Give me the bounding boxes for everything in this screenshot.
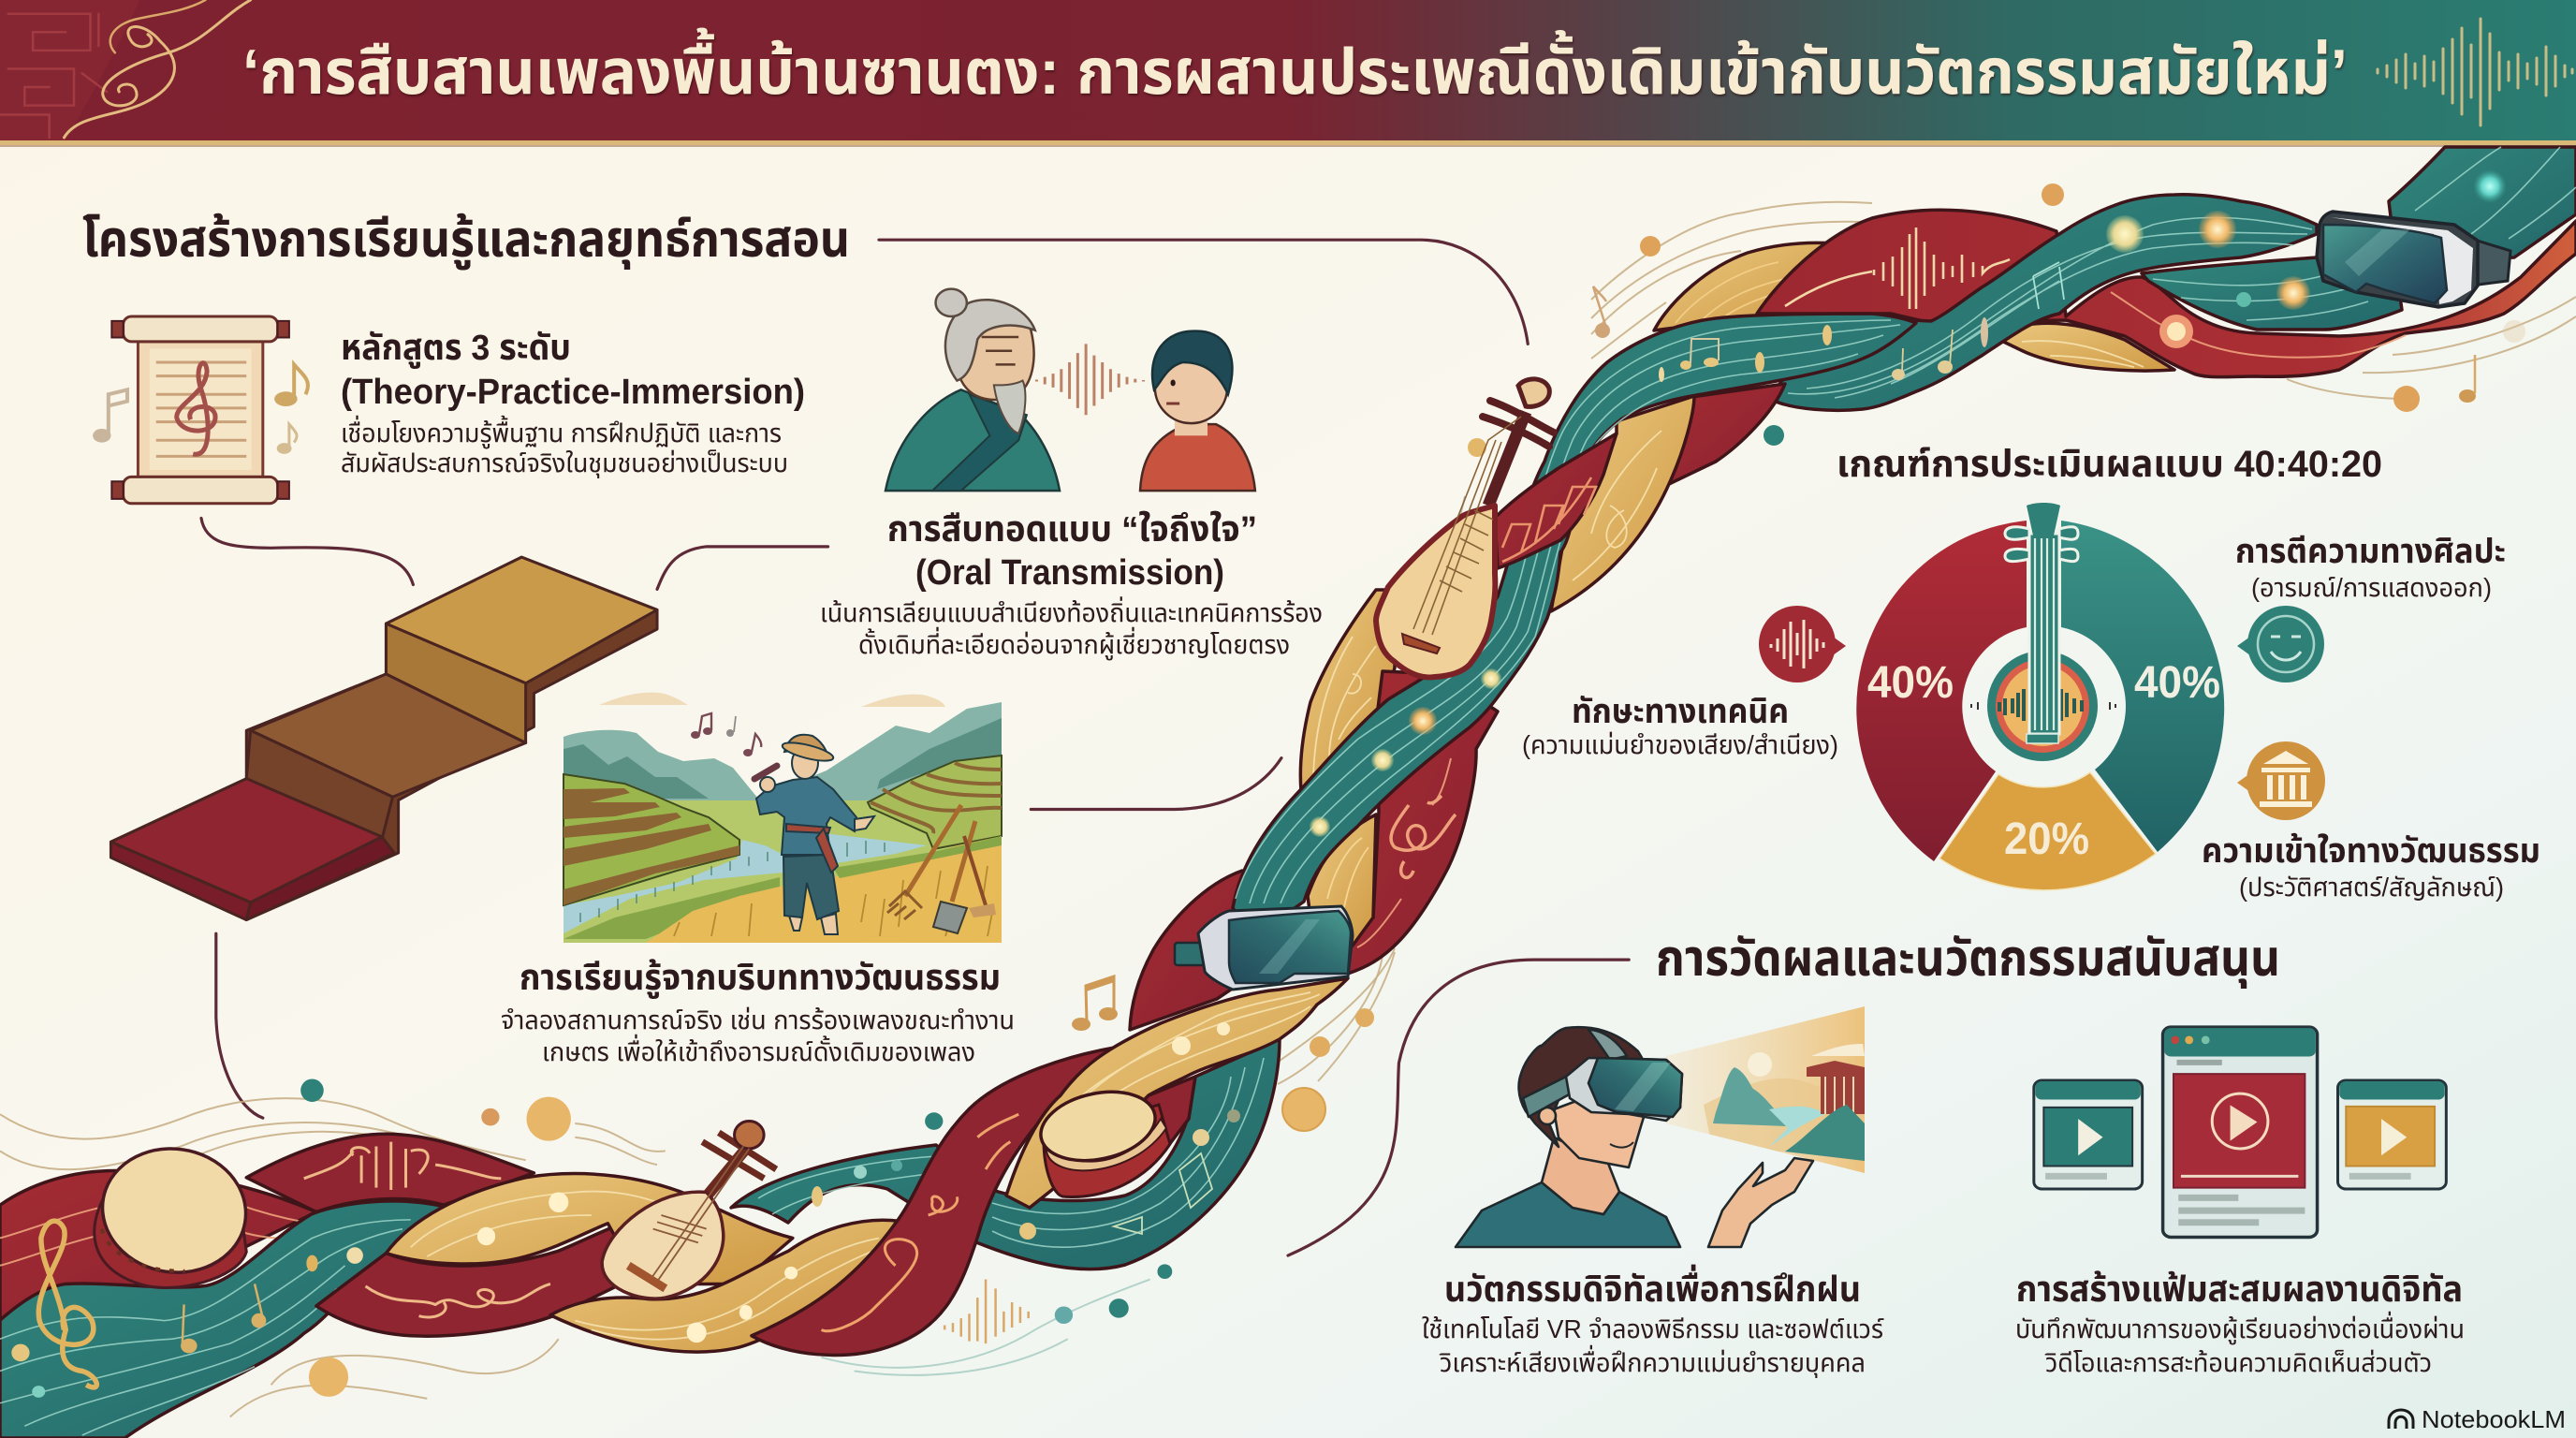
slice: cultural understanding 20% — [1939, 772, 2156, 890]
text block: three level curriculum: เชื่อมโยงความรู้พื้นฐาน การฝึกปฏิบัติ และการ — [341, 415, 782, 449]
text block: digital innovation: ใช้เทคโนโลยี VR จำลองพิธีกรรม และซอฟต์แวร์ — [1422, 1314, 1884, 1343]
terraces left — [564, 774, 739, 905]
drum: left — [95, 1147, 251, 1287]
lute icon in donut — [2005, 503, 2078, 743]
icon: curriculum scroll — [93, 316, 308, 504]
water channels — [564, 840, 783, 933]
label: technical skill — [1522, 692, 1838, 759]
window right — [2338, 1080, 2446, 1189]
text block: oral transmission: การสืบทอดแบบ “ใจถึงใจ” — [887, 510, 1257, 550]
heading: learning structure: โครงสร้างการเรียนรู้และกลยุทธ์การสอน — [82, 212, 850, 270]
child figure — [1140, 331, 1255, 491]
text block: three level curriculum: หลักสูตร 3 ระดับ — [341, 329, 571, 369]
label: technical skill: (ความแม่นยำของเสียง/สำเนียง) — [1522, 730, 1838, 759]
chart: 40:40:20 donut: 40% — [2134, 658, 2220, 708]
ribbon: teal diagonal — [1233, 314, 1916, 936]
text block: digital portfolio — [2015, 1270, 2465, 1377]
chart: 40:40:20 donut: 20% — [2004, 814, 2089, 864]
grass strips and golden field — [564, 877, 780, 939]
illustration: student with VR headset — [1456, 1006, 1865, 1247]
pipa: upper — [1376, 379, 1554, 677]
illustration: elder and child — [886, 289, 1255, 491]
ribbon: red fret panel — [1495, 433, 1617, 568]
text block: digital innovation — [1422, 1264, 1884, 1378]
heading: measurement and innovation: การวัดผลและนวัตกรรมสนับสนุน — [1656, 931, 2280, 989]
text block: three level curriculum: (Theory-Practice-Immersion) — [341, 373, 805, 412]
label: cultural understanding: (ประวัติศาสตร์/สัญลักษณ์) — [2239, 873, 2504, 902]
window left — [2034, 1080, 2143, 1189]
upper flow lines — [1591, 202, 1872, 300]
label: artistic interpretation: (อารมณ์/การแสดงออก) — [2251, 573, 2492, 602]
notes above farmer — [691, 713, 761, 756]
terraces right — [868, 756, 1002, 849]
lower left ribbons group — [0, 1134, 633, 1438]
vr headset: ribbon middle — [1175, 906, 1353, 990]
ribbon: right teal band — [731, 1039, 1280, 1269]
illustration: singer in rice terraces — [564, 693, 1002, 943]
floating music notes — [1072, 286, 2476, 1031]
farmer figure — [754, 735, 874, 934]
ribbon: front gold band — [1006, 978, 1348, 1208]
chart: 40:40:20 donut — [1856, 503, 2224, 890]
slice: technical skill 40% — [1856, 521, 2027, 861]
header banner — [0, 0, 2576, 147]
text block: digital innovation: วิเคราะห์เสียงเพื่อฝึกความแม่นยำรายบุคคล — [1439, 1344, 1866, 1378]
notes on teal diagonal — [1659, 325, 1832, 382]
text block: cultural context learning: การเรียนรู้จากบริบททางวัฒนธรรม — [520, 959, 1001, 999]
ribbon: gold behind headset — [1308, 814, 1376, 946]
connector lines — [201, 240, 1629, 1255]
ribbon: back gold arch — [1654, 242, 2174, 371]
title: ‘การสืบสานเพลงพื้นบ้านซานตง: การผสานประเพณีดั้งเดิมเข้ากับนวัตกรรมสมัยใหม่’ — [242, 27, 2348, 108]
ribbon: red segment behind gold — [1669, 384, 1785, 484]
icon: cultural temple — [2237, 741, 2325, 820]
label: cultural understanding: ความเข้าใจทางวัฒนธรรม — [2202, 831, 2540, 870]
ribbon: left red bands — [0, 1134, 534, 1321]
label: technical skill: ทักษะทางเทคนิค — [1572, 692, 1789, 730]
text block: oral transmission: ดั้งเดิมที่ละเอียดอ่อนจากผู้เชี่ยวชาญโดยตรง — [858, 626, 1290, 661]
farm tools — [887, 805, 996, 933]
icon: treble clef — [38, 1221, 96, 1387]
projected landscape beam — [1666, 1006, 1865, 1173]
text block: cultural context learning: จำลองสถานการณ์จริง เช่น การร้องเพลงขณะทำงาน — [501, 1005, 1015, 1034]
ribbon: teal rear band — [1772, 147, 2576, 410]
diagram: stepped curriculum block — [110, 557, 657, 920]
drum: right — [1034, 1082, 1170, 1196]
text block: cultural context learning — [501, 959, 1015, 1066]
text block: oral transmission: เน้นการเลียนแบบสำเนียงท้องถิ่นและเทคนิคการร้อง — [820, 596, 1323, 627]
text block: three level curriculum — [341, 329, 805, 478]
ribbon: red behind right drum — [1123, 1077, 1195, 1152]
vr headset: ribbon upper — [2317, 212, 2510, 307]
NotebookLM logo: NotebookLM — [2422, 1405, 2566, 1433]
text block: cultural context learning: เกษตร เพื่อให้เข้าถึงอารมณ์ดั้งเดิมของเพลง — [542, 1034, 975, 1066]
pipa: lower — [602, 1122, 776, 1299]
notes on teal band — [1892, 262, 2064, 380]
ribbon: lower red band — [316, 1224, 633, 1336]
icon: technical skill wave — [1759, 606, 1846, 682]
header corner ornament — [0, 0, 251, 140]
scroll music notes — [93, 364, 308, 454]
text block: digital portfolio: การสร้างแฟ้มสะสมผลงานดิจิทัล — [2016, 1270, 2463, 1310]
heading: assessment criteria: เกณฑ์การประเมินผลแบบ 40:40:20 — [1837, 444, 2382, 485]
ribbon: gold diagonal upper — [1551, 396, 1694, 611]
text block: digital portfolio: บันทึกพัฒนาการของผู้เรียนอย่างต่อเนื่องผ่าน — [2015, 1311, 2465, 1345]
window center — [2163, 1027, 2318, 1237]
chart: 40:40:20 donut: 40% — [1867, 658, 1954, 708]
ribbon: red front left — [1130, 871, 1254, 1030]
slice: interpretation 40% — [2061, 521, 2224, 852]
student figure — [1456, 1027, 1813, 1247]
illustration: video portfolio windows — [2034, 1027, 2446, 1237]
text block: digital innovation: นวัตกรรมดิจิทัลเพื่อการฝึกฝน — [1444, 1264, 1861, 1310]
center medallion — [1971, 651, 2115, 761]
text block: oral transmission: (Oral Transmission) — [915, 553, 1224, 593]
center ribbons group — [386, 1045, 1134, 1355]
ribbon: red arch to right — [1757, 210, 2576, 377]
ribbon: red under teal diagonal — [1348, 671, 1498, 974]
label: artistic interpretation — [2235, 532, 2506, 602]
ribbon: left teal band — [0, 1201, 447, 1438]
sound wave between figures — [1036, 344, 1144, 415]
label: artistic interpretation: การตีความทางศิลปะ — [2235, 532, 2506, 570]
header sound wave — [2378, 19, 2572, 125]
label: cultural understanding — [2202, 831, 2540, 902]
icon: interpretation smile — [2237, 606, 2324, 682]
ribbon: middle gold bands — [386, 1174, 900, 1352]
text block: oral transmission — [820, 510, 1323, 661]
ribbon: gold diagonal lower — [1300, 590, 1395, 791]
text block: three level curriculum: สัมผัสประสบการณ์จริงในชุมชนอย่างเป็นระบบ — [341, 448, 788, 478]
text block: digital portfolio: วิดีโอและการสะท้อนความคิดเห็นส่วนตัว — [2044, 1348, 2432, 1377]
ribbon: central red band — [752, 1045, 1134, 1355]
